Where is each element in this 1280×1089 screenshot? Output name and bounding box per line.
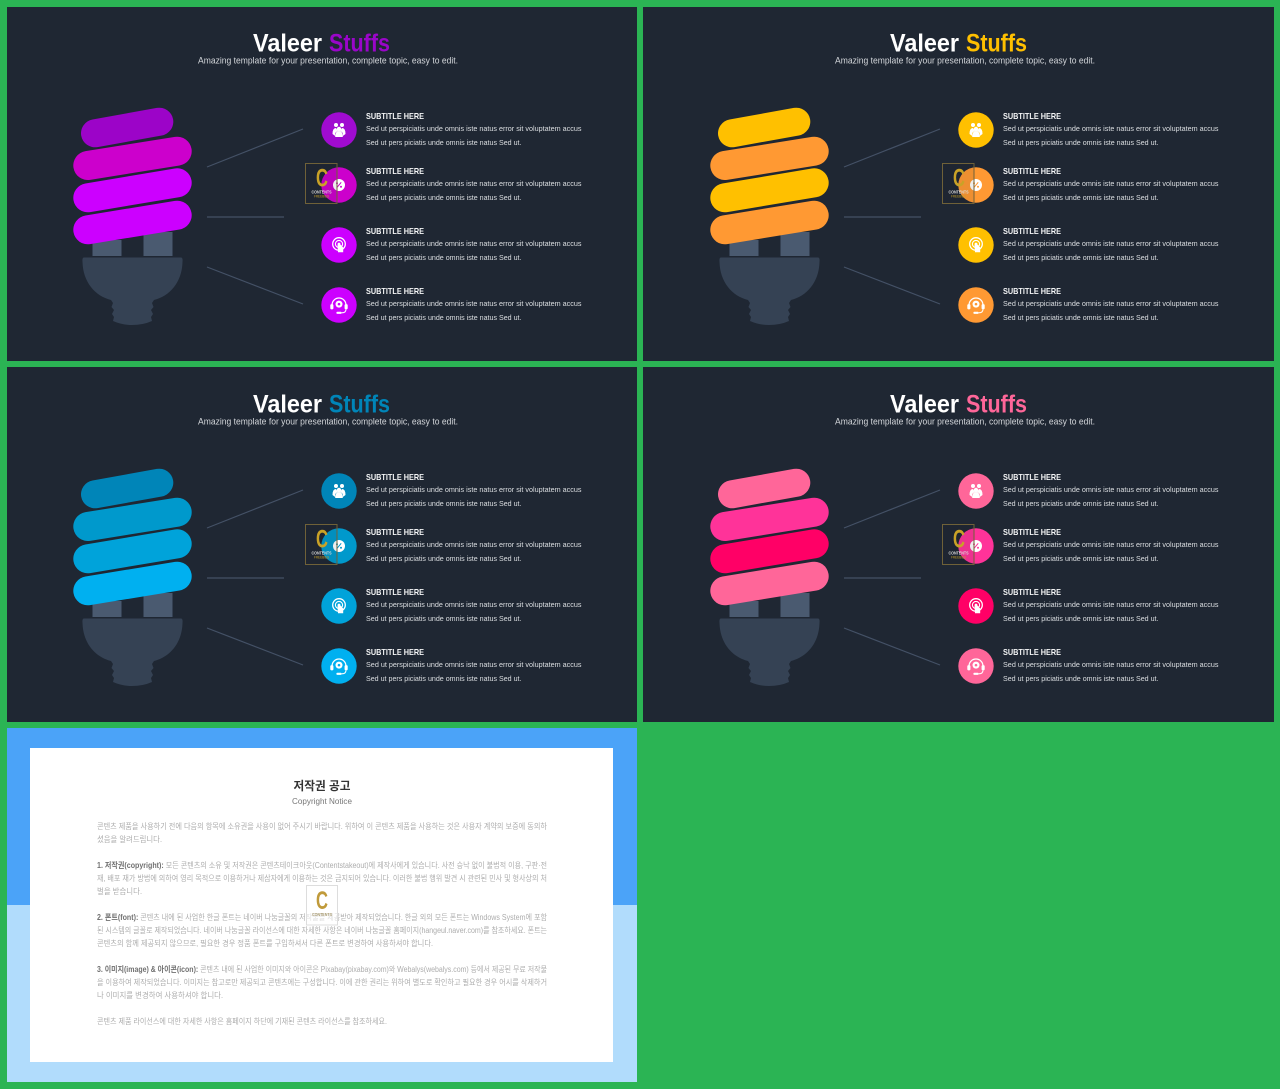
watermark: CONTENTS [948, 190, 968, 194]
item 2: Sed ut perspiciatis unde omnis iste natus error sit voluptatem accus [1003, 179, 1219, 188]
bulb illustration [82, 122, 183, 325]
item 1: SUBTITLE HERE [366, 472, 424, 482]
item 2 [958, 527, 1219, 564]
panel: pink bulb slide [643, 367, 1274, 722]
item 1: Sed ut perspiciatis unde omnis iste natus error sit voluptatem accus [1003, 485, 1219, 494]
tagline: Amazing template for your presentation, complete topic, easy to edit. [198, 416, 458, 428]
item 4: SUBTITLE HERE [366, 647, 424, 657]
item 2: Sed ut pers piciatis unde omnis iste natus Sed ut. [1003, 554, 1158, 563]
item 4 [321, 647, 582, 684]
title: Stuffs [329, 30, 390, 58]
item 1: Sed ut perspiciatis unde omnis iste natus error sit voluptatem accus [366, 124, 582, 133]
title [253, 30, 390, 58]
item 3 [321, 587, 582, 624]
item 3: Sed ut perspiciatis unde omnis iste natus error sit voluptatem accus [366, 239, 582, 248]
item 1: SUBTITLE HERE [1003, 111, 1061, 121]
watermark: CONTENTS [948, 550, 968, 556]
section 1: copyright [97, 860, 547, 896]
item 4: Sed ut perspiciatis unde omnis iste natus error sit voluptatem accus [366, 660, 582, 669]
item 1 [321, 111, 582, 148]
item 3: Sed ut pers piciatis unde omnis iste natus Sed ut. [366, 614, 522, 623]
watermark: CONTENTS [312, 190, 332, 194]
item 2: SUBTITLE HERE [366, 166, 424, 176]
item 3: SUBTITLE HERE [366, 226, 424, 236]
watermark: C [316, 164, 328, 192]
item 1: SUBTITLE HERE [366, 111, 424, 121]
item 1 [321, 472, 582, 509]
section 1: copyright: 재, 배포 재가 방법에 의하여 영리 목적으로 이용하거나 제삼자에게 이용하는 것은 금지되어 있습니다. 이러한 불법 행위 발견 시 관련된 민사 및 형사상의 처 [97, 873, 547, 883]
closing line: 콘텐츠 제품 라이선스에 대한 자세한 사항은 홈페이지 하단에 기재된 콘텐츠 라이선스를 참조하세요. [97, 1016, 387, 1026]
connector lines [207, 129, 303, 304]
notice subheading: Copyright Notice [292, 796, 352, 806]
tagline: Amazing template for your presentation, complete topic, easy to edit. [835, 416, 1095, 428]
section 1: copyright: 1. 저작권(copyright): 모든 콘텐츠의 소유 및 저작권은 콘텐츠테이크아웃(Contentstakeout)에 제작사에게 있습니다. 사전 승낙 없이 불법적 이용, 구판·전 [97, 860, 547, 870]
item 4: Sed ut pers piciatis unde omnis iste natus Sed ut. [1003, 313, 1158, 322]
item 2: SUBTITLE HERE [1003, 527, 1061, 537]
item 4: SUBTITLE HERE [366, 286, 424, 296]
title: Valeer [253, 390, 322, 418]
item 3: Sed ut pers piciatis unde omnis iste natus Sed ut. [1003, 253, 1158, 262]
watermark: C [953, 164, 965, 192]
item 2 [321, 166, 582, 203]
title: Valeer [890, 390, 959, 418]
title [890, 390, 1027, 418]
section 3: image and icon: 나 이미지를 변경하여 사용하셔야 합니다. [97, 990, 223, 1000]
item 4: Sed ut pers piciatis unde omnis iste natus Sed ut. [366, 313, 522, 322]
item 1: Sed ut perspiciatis unde omnis iste natus error sit voluptatem accus [366, 485, 582, 494]
item 3: SUBTITLE HERE [1003, 226, 1061, 236]
intro paragraph: 콘텐츠 제품을 사용하기 전에 다음의 항목에 소유권을 사용이 없어 주시기 바랍니다. 위하여 이 콘텐츠 제품을 사용하는 것은 사용자 계약의 보증에 동의하 [97, 821, 548, 831]
item 4: Sed ut perspiciatis unde omnis iste natus error sit voluptatem accus [366, 299, 582, 308]
connector lines [844, 490, 940, 665]
watermark: C [316, 526, 328, 554]
watermark: FREEBIES [951, 556, 967, 560]
item 3: Sed ut perspiciatis unde omnis iste natus error sit voluptatem accus [1003, 600, 1219, 609]
item 4: SUBTITLE HERE [1003, 647, 1061, 657]
item 2: Sed ut pers piciatis unde omnis iste natus Sed ut. [1003, 193, 1158, 202]
tagline: Amazing template for your presentation, complete topic, easy to edit. [835, 56, 1095, 66]
watermark: CONTENTS [312, 912, 332, 917]
item 2: Sed ut perspiciatis unde omnis iste natus error sit voluptatem accus [366, 179, 582, 188]
section 3: image and icon: 3. 이미지(image) & 아이콘(icon): 콘텐츠 내에 된 사업한 이미지와 아이콘은 Pixabay(pixabay.com)와 Webalys(webalys.com) 등에서 제공된 무료 저작물 [97, 964, 547, 974]
item 3: Sed ut perspiciatis unde omnis iste natus error sit voluptatem accus [1003, 239, 1219, 248]
item 3 [958, 587, 1219, 624]
item 1: SUBTITLE HERE [1003, 472, 1061, 482]
panel: yellow bulb slide [643, 7, 1274, 361]
panel: blue bulb slide [7, 367, 637, 722]
bulb illustration [82, 483, 183, 686]
item 3 [958, 226, 1219, 263]
item 4 [321, 286, 582, 323]
item 4: SUBTITLE HERE [1003, 286, 1061, 296]
item 3: Sed ut pers piciatis unde omnis iste natus Sed ut. [366, 253, 522, 262]
item 2: Sed ut pers piciatis unde omnis iste natus Sed ut. [366, 193, 522, 202]
item 1 [958, 111, 1219, 148]
item 4: Sed ut perspiciatis unde omnis iste natus error sit voluptatem accus [1003, 660, 1219, 669]
watermark: C [953, 526, 965, 554]
intro paragraph: 셨음을 알려드립니다. [97, 834, 162, 844]
item 2 [958, 166, 1219, 203]
item 3: Sed ut pers piciatis unde omnis iste natus Sed ut. [1003, 614, 1158, 623]
item 2: SUBTITLE HERE [1003, 166, 1061, 176]
title: Stuffs [329, 390, 390, 418]
item 1: Sed ut pers piciatis unde omnis iste natus Sed ut. [366, 499, 522, 508]
watermark [306, 524, 337, 564]
title [890, 30, 1027, 58]
watermark [306, 164, 337, 204]
watermark: FREEBIES [314, 556, 330, 560]
watermark [306, 886, 338, 925]
watermark: FREEBIES [314, 194, 330, 198]
section 2: font [97, 912, 548, 948]
item 2: SUBTITLE HERE [366, 527, 424, 537]
item 3: SUBTITLE HERE [366, 587, 424, 597]
item 4: Sed ut pers piciatis unde omnis iste natus Sed ut. [366, 674, 522, 683]
item 1: Sed ut pers piciatis unde omnis iste natus Sed ut. [1003, 499, 1158, 508]
watermark: C [316, 887, 328, 915]
tagline: Amazing template for your presentation, complete topic, easy to edit. [198, 56, 458, 66]
intro paragraph [97, 821, 548, 844]
item 3: Sed ut perspiciatis unde omnis iste natus error sit voluptatem accus [366, 600, 582, 609]
notice heading: 저작권 공고 [294, 778, 350, 793]
item 2 [321, 527, 582, 564]
section 3: image and icon: 을 이용하여 제작되었습니다. 이미지는 참고로만 제공되고 콘텐츠에는 구성합니다. 이에 관한 권리는 위하여 별도로 확인하고 필요한 경우 어시를 삭제하거 [97, 977, 547, 987]
title: Stuffs [966, 30, 1027, 58]
item 2: Sed ut perspiciatis unde omnis iste natus error sit voluptatem accus [366, 540, 582, 549]
section 2: font: 콘텐츠의 함께 제공되지 않으므로, 필요한 경우 정품 폰트를 구입하셔서 다른 폰트로 변경하여 사용하셔야 합니다. [97, 938, 433, 948]
item 1: Sed ut perspiciatis unde omnis iste natus error sit voluptatem accus [1003, 124, 1219, 133]
item 4 [958, 286, 1219, 323]
item 2: Sed ut perspiciatis unde omnis iste natus error sit voluptatem accus [1003, 540, 1219, 549]
title [253, 390, 390, 418]
item 3 [321, 226, 582, 263]
item 4: Sed ut pers piciatis unde omnis iste natus Sed ut. [1003, 674, 1158, 683]
item 1: Sed ut pers piciatis unde omnis iste natus Sed ut. [366, 138, 522, 147]
section 2: font: 된 시스템의 글꼴로 제작되었습니다. 네이버 나눔글꼴 라이선스에 대한 자세한 사항은 네이버 나눔글꼴 홈페이지(hangeul.naver.com)를 참조하세요. 폰트는 [97, 925, 547, 935]
item 1: Sed ut pers piciatis unde omnis iste natus Sed ut. [1003, 138, 1158, 147]
bulb illustration [719, 122, 820, 325]
panel: purple bulb slide [7, 7, 637, 361]
title: Valeer [253, 30, 322, 58]
title: Stuffs [966, 390, 1027, 418]
watermark [942, 164, 974, 204]
section 3: image and icon [97, 964, 547, 1000]
item 2: Sed ut pers piciatis unde omnis iste natus Sed ut. [366, 554, 522, 563]
connector lines [844, 129, 940, 304]
watermark: CONTENTS [312, 550, 332, 556]
watermark [942, 524, 974, 564]
item 4 [958, 647, 1219, 684]
bulb illustration [719, 483, 820, 686]
watermark: FREEBIES [951, 194, 967, 198]
item 3: SUBTITLE HERE [1003, 587, 1061, 597]
section 1: copyright: 벌을 받습니다. [97, 886, 142, 896]
connector lines [207, 490, 303, 665]
panel: copyright notice [7, 728, 637, 1082]
item 1 [958, 472, 1219, 509]
section 2: font: 2. 폰트(font): 콘텐츠 내에 된 사업한 한글 폰트는 네이버 나눔글꼴의 저작물을 제공받아 제작되었습니다. 한글 외의 모든 폰트는 Windows System에 포함 [97, 912, 548, 922]
item 4: Sed ut perspiciatis unde omnis iste natus error sit voluptatem accus [1003, 299, 1219, 308]
title: Valeer [890, 30, 959, 58]
